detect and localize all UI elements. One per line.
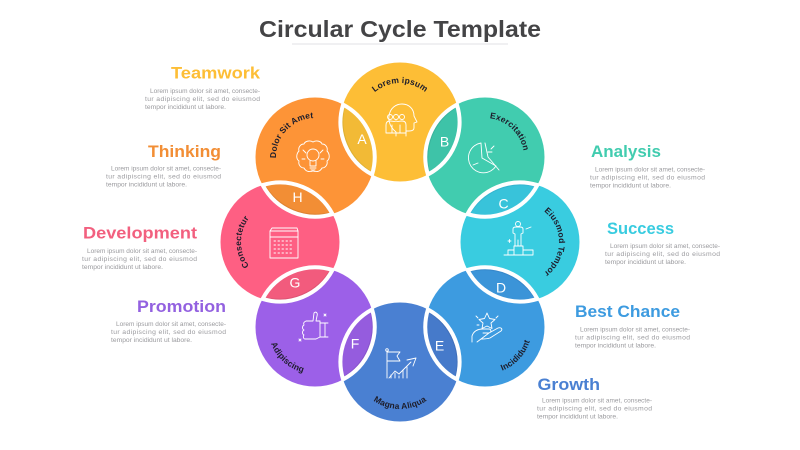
- circle: purple: [256, 268, 374, 386]
- text block: Promotion: Promotion: [137, 298, 226, 316]
- curved label: Lorem ipsum: Lorem ipsum: [372, 76, 427, 92]
- circle: orange: [256, 98, 374, 216]
- text block: Success: tempor incididunt ut labore.: [605, 259, 686, 266]
- circle: cyan: [460, 182, 580, 302]
- circle: teal: [426, 98, 544, 216]
- text block: Thinking: tur adipiscing elit, sed do eiusmod: [106, 174, 221, 180]
- circle: yellow: [340, 62, 460, 182]
- text block: Analysis: tempor incididunt ut labore.: [590, 182, 671, 190]
- lens C: [466, 180, 540, 219]
- text block: Analysis: Lorem ipsum dolor sit amet, consecte-: [595, 166, 705, 174]
- text block: Development: [82, 224, 198, 271]
- curved label: Exercitation: Exercitation: [490, 112, 528, 150]
- icon: star over hand: [472, 313, 502, 342]
- letter A: A: [357, 131, 367, 147]
- text block: Analysis: [590, 143, 705, 190]
- lens F: [338, 308, 377, 382]
- lens E: [423, 308, 462, 382]
- text block: Best Chance: tempor incididunt ut labore.: [575, 342, 656, 350]
- text block: Promotion: tempor incididunt ut labore.: [111, 337, 192, 344]
- letter F: F: [351, 336, 359, 352]
- text block: Best Chance: tur adipiscing elit, sed do eiusmod: [575, 334, 690, 342]
- icon: team in head: [386, 104, 417, 136]
- circle: pink: [220, 182, 340, 302]
- text block: Thinking: Thinking: [148, 143, 221, 161]
- text block: Thinking: tempor incididunt ut labore.: [106, 182, 187, 188]
- title: Circular Cycle Template: [259, 16, 541, 42]
- lens H: [260, 180, 334, 219]
- curved label: Dolor Sit Amet: Dolor Sit Amet: [270, 112, 314, 158]
- text block: Development: tur adipiscing elit, sed do eiusmod: [82, 256, 197, 263]
- circle: dark blue: [340, 302, 460, 422]
- text block: Teamwork: tempor incididunt ut labore.: [145, 104, 226, 111]
- text block: Teamwork: Teamwork: [171, 64, 261, 82]
- text block: Success: tur adipiscing elit, sed do eiusmod: [605, 251, 720, 258]
- text block: Best Chance: Best Chance: [575, 303, 680, 321]
- curved label: Incididunt: Incididunt: [500, 340, 530, 370]
- text block: Teamwork: Lorem ipsum dolor sit amet, consecte-: [150, 88, 260, 95]
- letter H: H: [292, 189, 303, 205]
- text block: Teamwork: [145, 64, 261, 111]
- text block: Growth: Growth: [538, 376, 600, 394]
- curved label: Magna Aliqua: Magna Aliqua: [374, 396, 427, 410]
- curved label: Consectetur: Consectetur: [236, 216, 248, 268]
- text block: Thinking: Lorem ipsum dolor sit amet, consecte-: [111, 166, 221, 172]
- text block: Analysis: Analysis: [591, 143, 661, 161]
- text block: Promotion: [111, 298, 226, 344]
- text block: Growth: tur adipiscing elit, sed do eiusmod: [537, 406, 652, 413]
- icon: brain with bulb: [297, 141, 329, 172]
- text block: Growth: [537, 376, 652, 421]
- circle: blue: [426, 268, 544, 386]
- text block: Development: Development: [83, 224, 198, 242]
- icon: pie clock: [468, 143, 499, 173]
- text block: Analysis: tur adipiscing elit, sed do eiusmod: [590, 174, 705, 182]
- lens B: [423, 102, 462, 176]
- text block: Best Chance: [575, 303, 690, 350]
- lens D: [466, 265, 540, 304]
- icon: flag and rising arrow: [386, 349, 416, 378]
- text block: Development: Lorem ipsum dolor sit amet, consecte-: [87, 248, 197, 255]
- lens G: [260, 265, 334, 304]
- text block: Success: [605, 220, 720, 266]
- text block: Development: tempor incididunt ut labore.: [82, 264, 163, 271]
- text block: Success: Success: [607, 220, 674, 238]
- letter E: E: [435, 338, 444, 354]
- text block: Growth: Lorem ipsum dolor sit amet, consecte-: [542, 398, 652, 405]
- text block: Promotion: tur adipiscing elit, sed do eiusmod: [111, 329, 226, 336]
- curved label: Adipiscing: Adipiscing: [271, 343, 304, 374]
- icon: calendar: [270, 228, 298, 258]
- text block: Promotion: Lorem ipsum dolor sit amet, consecte-: [116, 321, 226, 328]
- letter B: B: [440, 134, 449, 150]
- text block: Teamwork: tur adipiscing elit, sed do eiusmod: [145, 96, 260, 103]
- icon: winner on podium: [504, 222, 533, 255]
- text block: Success: Lorem ipsum dolor sit amet, consecte-: [610, 243, 720, 250]
- icon: thumbs up: [299, 312, 328, 341]
- text block: Best Chance: Lorem ipsum dolor sit amet, consecte-: [580, 326, 690, 334]
- text block: Thinking: [106, 143, 221, 188]
- letter C: C: [498, 196, 509, 212]
- letter D: D: [496, 280, 506, 296]
- text block: Growth: tempor incididunt ut labore.: [537, 414, 618, 421]
- letter G: G: [290, 274, 300, 290]
- lens A: [338, 102, 377, 176]
- curved label: Eiusmod Tempor: Eiusmod Tempor: [544, 207, 566, 276]
